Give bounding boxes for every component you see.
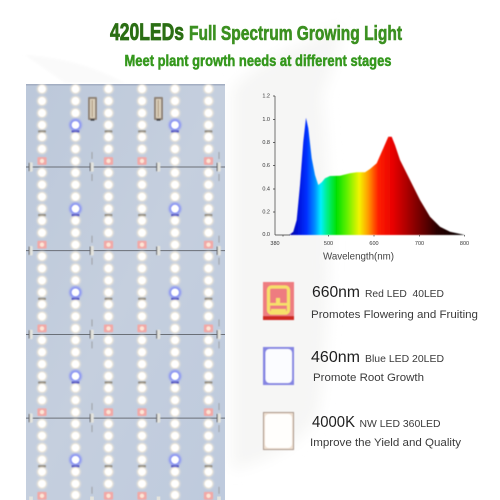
x axis labels [270,241,469,247]
y axis labels: 1.2 [262,94,270,100]
icon: red LED chip [263,282,294,320]
title [110,19,402,46]
y axis labels [262,94,270,238]
x axis title: Wavelength(nm) [323,250,394,262]
LED rows repeating [26,84,225,500]
axes [273,96,464,236]
y axis labels: 0.2 [262,210,270,216]
count red: Red LED 40LED [365,289,444,300]
x axis labels: 500 [324,241,333,247]
faint plant silhouette behind content [25,25,340,470]
chart: spectrum [262,94,469,262]
text: 460nm blue LED [311,349,444,384]
component: left resistor [88,97,97,121]
title rest: Full Spectrum Growing Light: Full Spectrum Growing Light [189,23,402,45]
count blue: Blue LED 20LED [365,354,444,365]
benefit red: Promotes Flowering and Fruiting [311,309,478,321]
y axis labels: 0.0 [262,232,270,238]
count white: NW LED 360LED [360,419,440,430]
text: 4000K NW LED [310,414,462,449]
y axis labels: 0.8 [262,140,270,146]
icon: white LED chip [263,412,294,450]
spectrum area [289,118,465,235]
text: 660nm red LED [311,284,478,321]
wavelength 460nm: 460nm [311,349,360,366]
title accent: 420LEDs: 420LEDs [110,19,184,46]
x axis labels: 800 [460,241,469,247]
y axis labels: 0.4 [262,186,270,192]
subtitle: Meet plant growth needs at different stages [124,53,392,70]
panel: LED board photo [26,84,225,500]
y axis labels: 1.0 [262,117,270,123]
benefit blue: Promote Root Growth [313,372,424,384]
x axis labels: 380 [270,241,280,247]
wavelength 660nm: 660nm [312,284,360,301]
icon: blue LED chip [263,347,294,385]
colour temperature 4000K: 4000K [312,414,356,431]
x axis labels: 700 [415,241,424,247]
benefit white: Improve the Yield and Quality [310,437,462,449]
x axis labels: 600 [369,241,379,247]
y axis labels: 0.6 [262,163,270,169]
component: right resistor [154,97,163,121]
